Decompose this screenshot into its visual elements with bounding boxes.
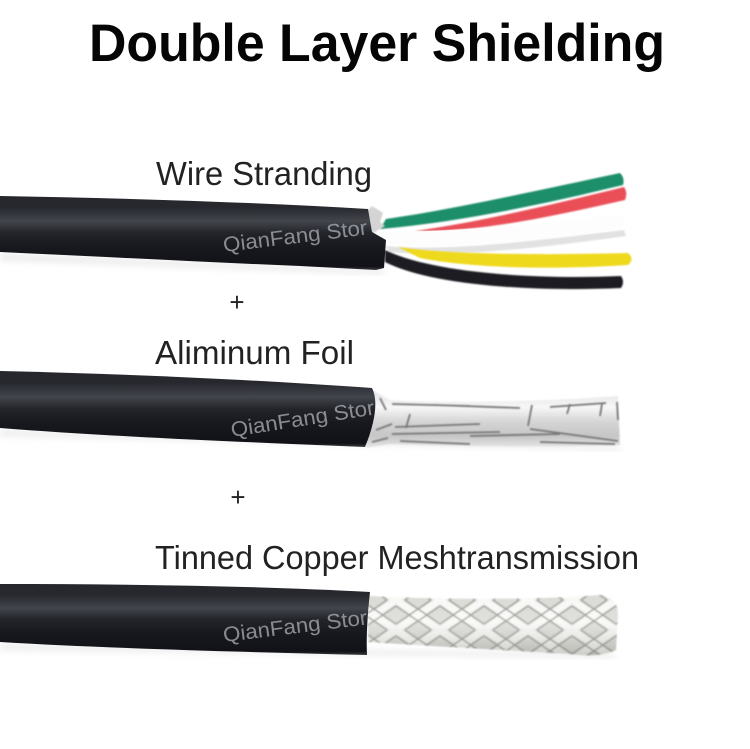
cable 2 foil section [366,390,620,448]
label: aluminum foil: Aliminum Foil [155,334,354,371]
title: Double Layer Shielding [89,14,665,73]
cable 1 frayed shield [366,206,385,234]
cable 1 red wire [415,187,626,231]
cable 3 jacket [0,584,370,655]
cable 2 shadow [0,430,620,450]
cable 3 watermark: QianFang Stor [222,606,369,647]
cable 1 jacket [0,196,386,270]
cable 1 yellow wire [398,247,632,268]
cable 1 shadow [0,254,385,274]
cable 1 black wire [385,250,623,289]
plus sign 1: + [229,287,245,317]
cable 1 white wire [375,214,624,245]
cable 2: aluminum foil [0,371,620,450]
cable 1 white wire shadow [385,230,626,254]
cable 2 foil creases [372,398,618,444]
cable 1 watermark: QianFang Stor [222,216,369,257]
cable 1: wire stranding [0,173,632,289]
cable 2 watermark: QianFang Stor [229,397,376,442]
cable 3: tinned copper mesh [0,584,618,658]
label: wire stranding: Wire Stranding [156,155,372,192]
cable 3 shadow [0,644,615,658]
label: tinned copper mesh: Tinned Copper Meshtransmission [155,539,639,576]
cable 1 green wire [380,173,624,229]
cable 2 jacket [0,371,375,447]
plus sign 2: + [230,482,246,512]
cable 3 braid section [368,595,618,655]
